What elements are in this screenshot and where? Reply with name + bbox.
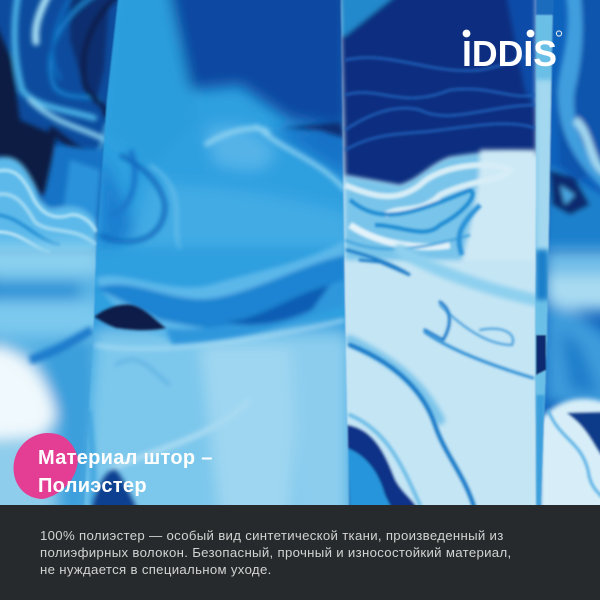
lower streaks	[347, 250, 535, 510]
text block: description: полиэфирных волокон. Безопасный, прочный и износостойкий материал,	[40, 545, 511, 560]
dark fold shadow	[94, 305, 166, 330]
panel 2: centre-left curtain fold	[80, 0, 360, 520]
title: Полиэстер	[38, 475, 147, 497]
panel 5: right curtain fold	[540, 0, 600, 515]
lower swirl	[0, 145, 106, 252]
text block: description: 100% полиэстер — особый вид синтетической ткани, произведенный из	[40, 528, 504, 542]
panel 4: narrow fold sliver	[535, 0, 554, 430]
text block: description	[40, 528, 511, 577]
text block: description: не нуждается в специальном уходе.	[40, 562, 272, 577]
logo: IDDIS: IDDIS	[462, 33, 557, 74]
panel 3: centre-right curtain fold	[340, 0, 540, 515]
title	[38, 447, 213, 497]
icon: pink blob behind title	[14, 433, 78, 499]
panel 1: left curtain fold	[0, 0, 119, 505]
panel: dark description footer	[0, 505, 600, 600]
title: Материал штор –	[38, 447, 213, 469]
